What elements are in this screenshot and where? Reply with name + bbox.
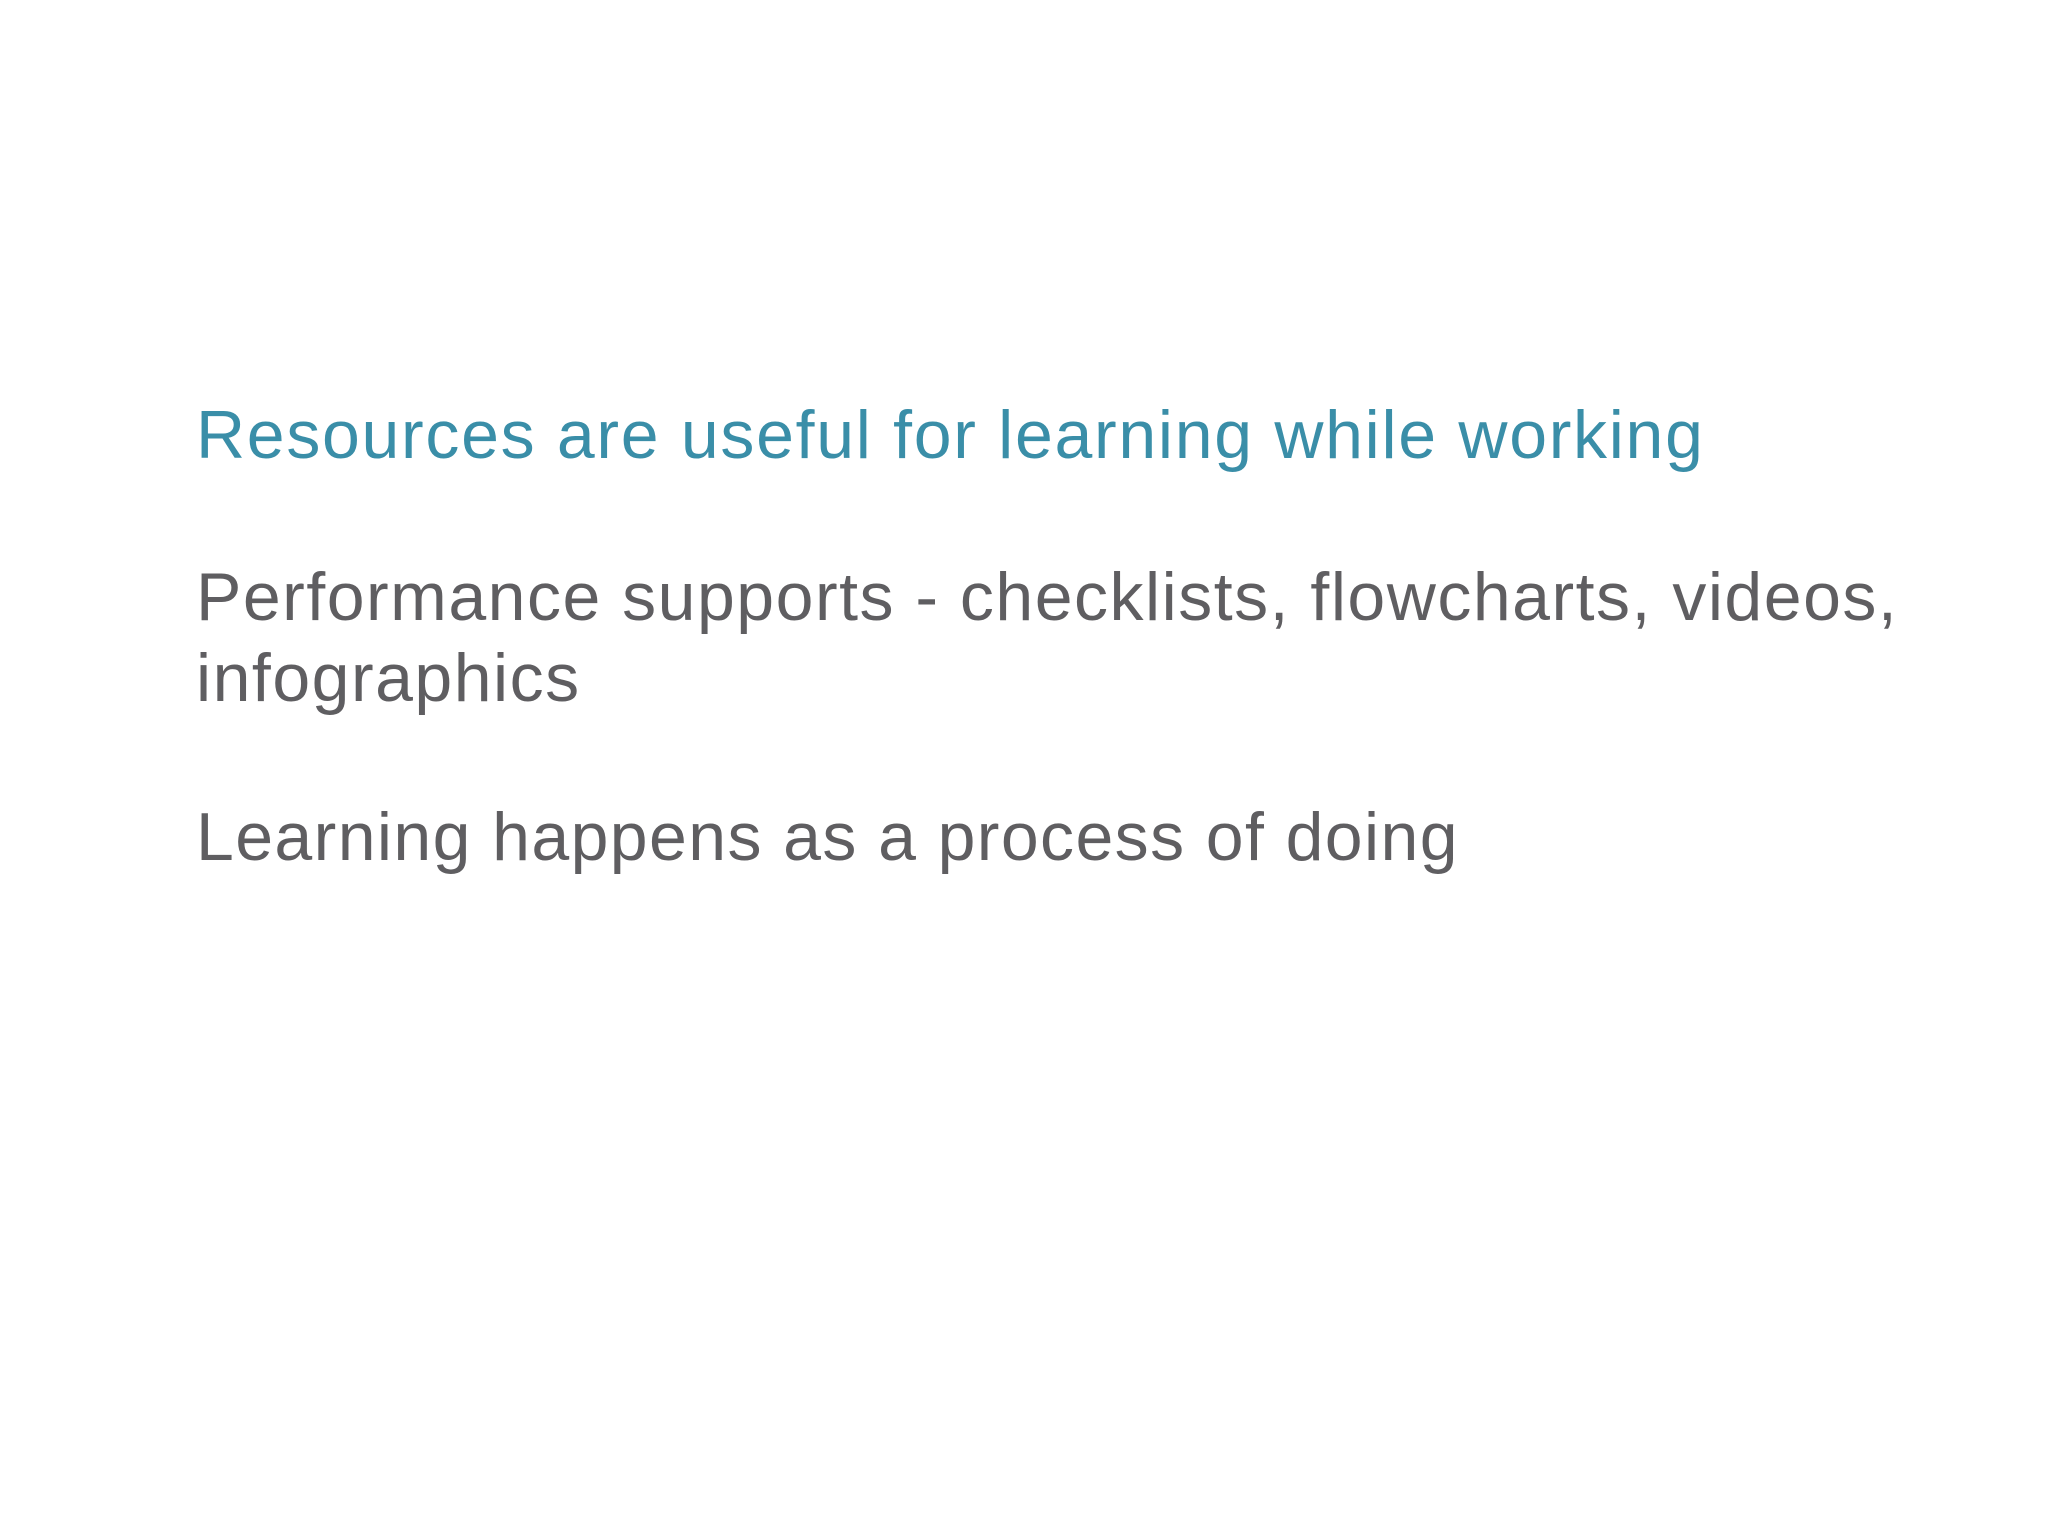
text block: performance supports: infographics <box>196 640 581 716</box>
text block: performance supports: Performance supports - checklists, flowcharts, videos, <box>196 559 1898 635</box>
text block: performance supports <box>196 559 1898 716</box>
heading: resources are useful: Resources are useful for learning while working <box>196 397 1705 473</box>
text block: learning happens: Learning happens as a process of doing <box>196 799 1459 875</box>
